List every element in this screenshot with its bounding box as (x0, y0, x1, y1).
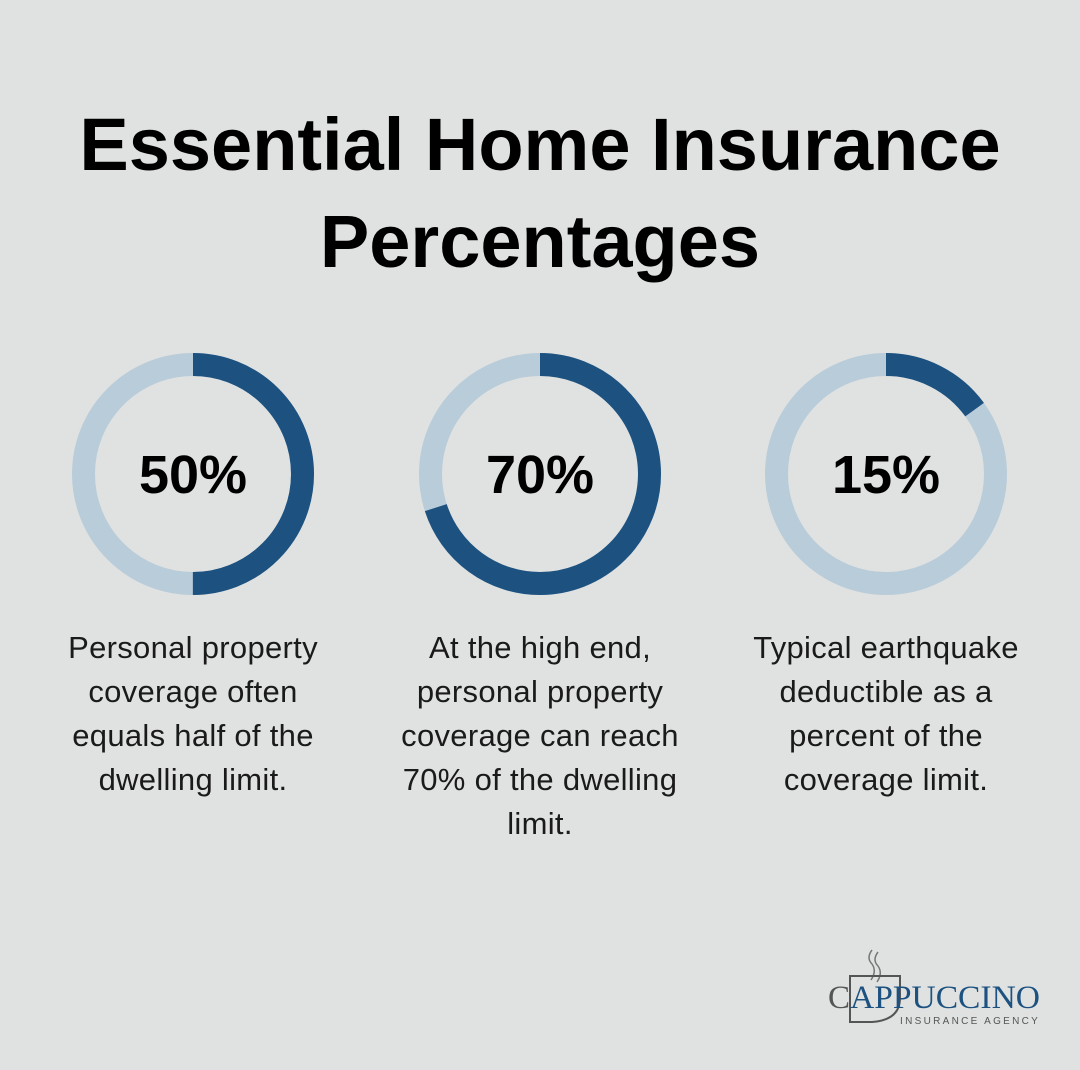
text: 15% description: deductible as a (779, 674, 993, 709)
logo: INSURANCE AGENCY (900, 1016, 1040, 1027)
text: 70% description: 70% of the dwelling (403, 762, 677, 797)
donut: 15%: 15% (832, 445, 940, 505)
text: 70% description: limit. (507, 806, 573, 841)
text: 15% description: coverage limit. (784, 762, 988, 797)
text: 70% description: coverage can reach (401, 718, 679, 753)
title (79, 103, 1001, 283)
text: 50% description (68, 630, 318, 797)
logo: C (828, 980, 850, 1016)
title: Percentages (320, 200, 760, 283)
donut: 50%: 50% (139, 445, 247, 505)
text: 15% description (753, 630, 1019, 797)
text: 15% description: Typical earthquake (753, 630, 1019, 665)
text: 50% description: coverage often (88, 674, 298, 709)
text: 70% description: personal property (417, 674, 663, 709)
logo: APPUCCINO (850, 980, 1040, 1016)
text: 70% description (401, 630, 679, 841)
text: 70% description: At the high end, (429, 630, 651, 665)
donut: 70%: 70% (486, 445, 594, 505)
donut: 15% (765, 353, 1007, 595)
text: 15% description: percent of the (789, 718, 983, 753)
title: Essential Home Insurance (79, 103, 1001, 186)
donut: 50% (72, 353, 314, 595)
logo (828, 950, 1040, 1027)
donut: 70% (419, 353, 661, 595)
text: 50% description: Personal property (68, 630, 318, 665)
text: 50% description: dwelling limit. (99, 762, 287, 797)
text: 50% description: equals half of the (72, 718, 314, 753)
